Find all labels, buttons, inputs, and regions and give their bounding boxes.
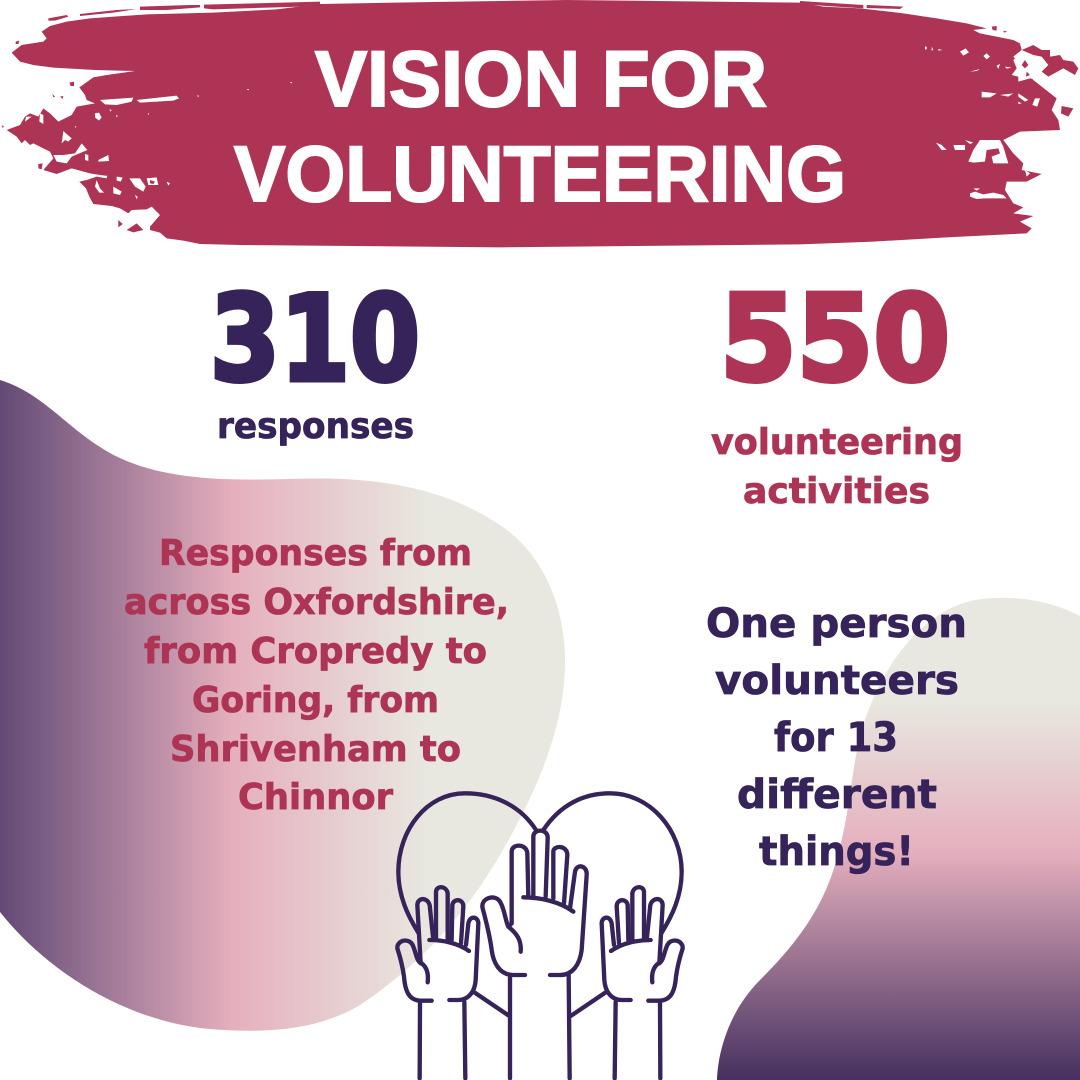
red flecks inside gaps bbox=[150, 60, 1030, 184]
text block: one person volunteers for 13 different things: things! bbox=[759, 829, 914, 875]
text block: one person volunteers for 13 different things: different bbox=[737, 772, 937, 818]
text block: responses from across Oxfordshire: Shrivenham to bbox=[170, 729, 461, 770]
text block: responses from across Oxfordshire: Chinnor bbox=[238, 777, 393, 818]
text block: responses from across Oxfordshire: from Cropredy to bbox=[144, 631, 487, 672]
stat: 550 volunteering activities bbox=[711, 271, 963, 512]
text block: one person volunteers for 13 different things: One person bbox=[706, 601, 967, 647]
left gradient blob bbox=[0, 380, 565, 1031]
text block: one person volunteers for 13 different things: volunteers bbox=[715, 658, 959, 704]
stat: 310 responses bbox=[210, 271, 420, 447]
stat: 310 responses: 310 bbox=[210, 271, 420, 409]
brush stroke gaps bbox=[25, 82, 292, 199]
text block: one person volunteers for 13 different things bbox=[706, 601, 967, 875]
text block: responses from across Oxfordshire: Goring, from bbox=[192, 680, 439, 721]
text block: responses from across Oxfordshire: Responses from bbox=[159, 533, 472, 574]
text block: responses from across Oxfordshire bbox=[124, 533, 509, 818]
text block: one person volunteers for 13 different things: for 13 bbox=[774, 715, 898, 761]
text block: responses from across Oxfordshire: across Oxfordshire, bbox=[124, 582, 509, 623]
title: VOLUNTEERING bbox=[234, 129, 846, 218]
top streaks and flecks bbox=[2, 1, 1078, 232]
title: VISION FOR bbox=[315, 34, 767, 123]
title bbox=[234, 34, 846, 218]
stat: 550 volunteering activities: 550 bbox=[720, 271, 950, 409]
title brush stroke banner bbox=[2, 0, 1078, 247]
stat: 550 volunteering activities: activities bbox=[743, 471, 930, 512]
stat: 310 responses: responses bbox=[217, 406, 414, 447]
icon: raised hands and heart bbox=[397, 793, 683, 1078]
stat: 550 volunteering activities: volunteering bbox=[711, 422, 963, 463]
right gradient blob bbox=[717, 598, 1080, 1080]
